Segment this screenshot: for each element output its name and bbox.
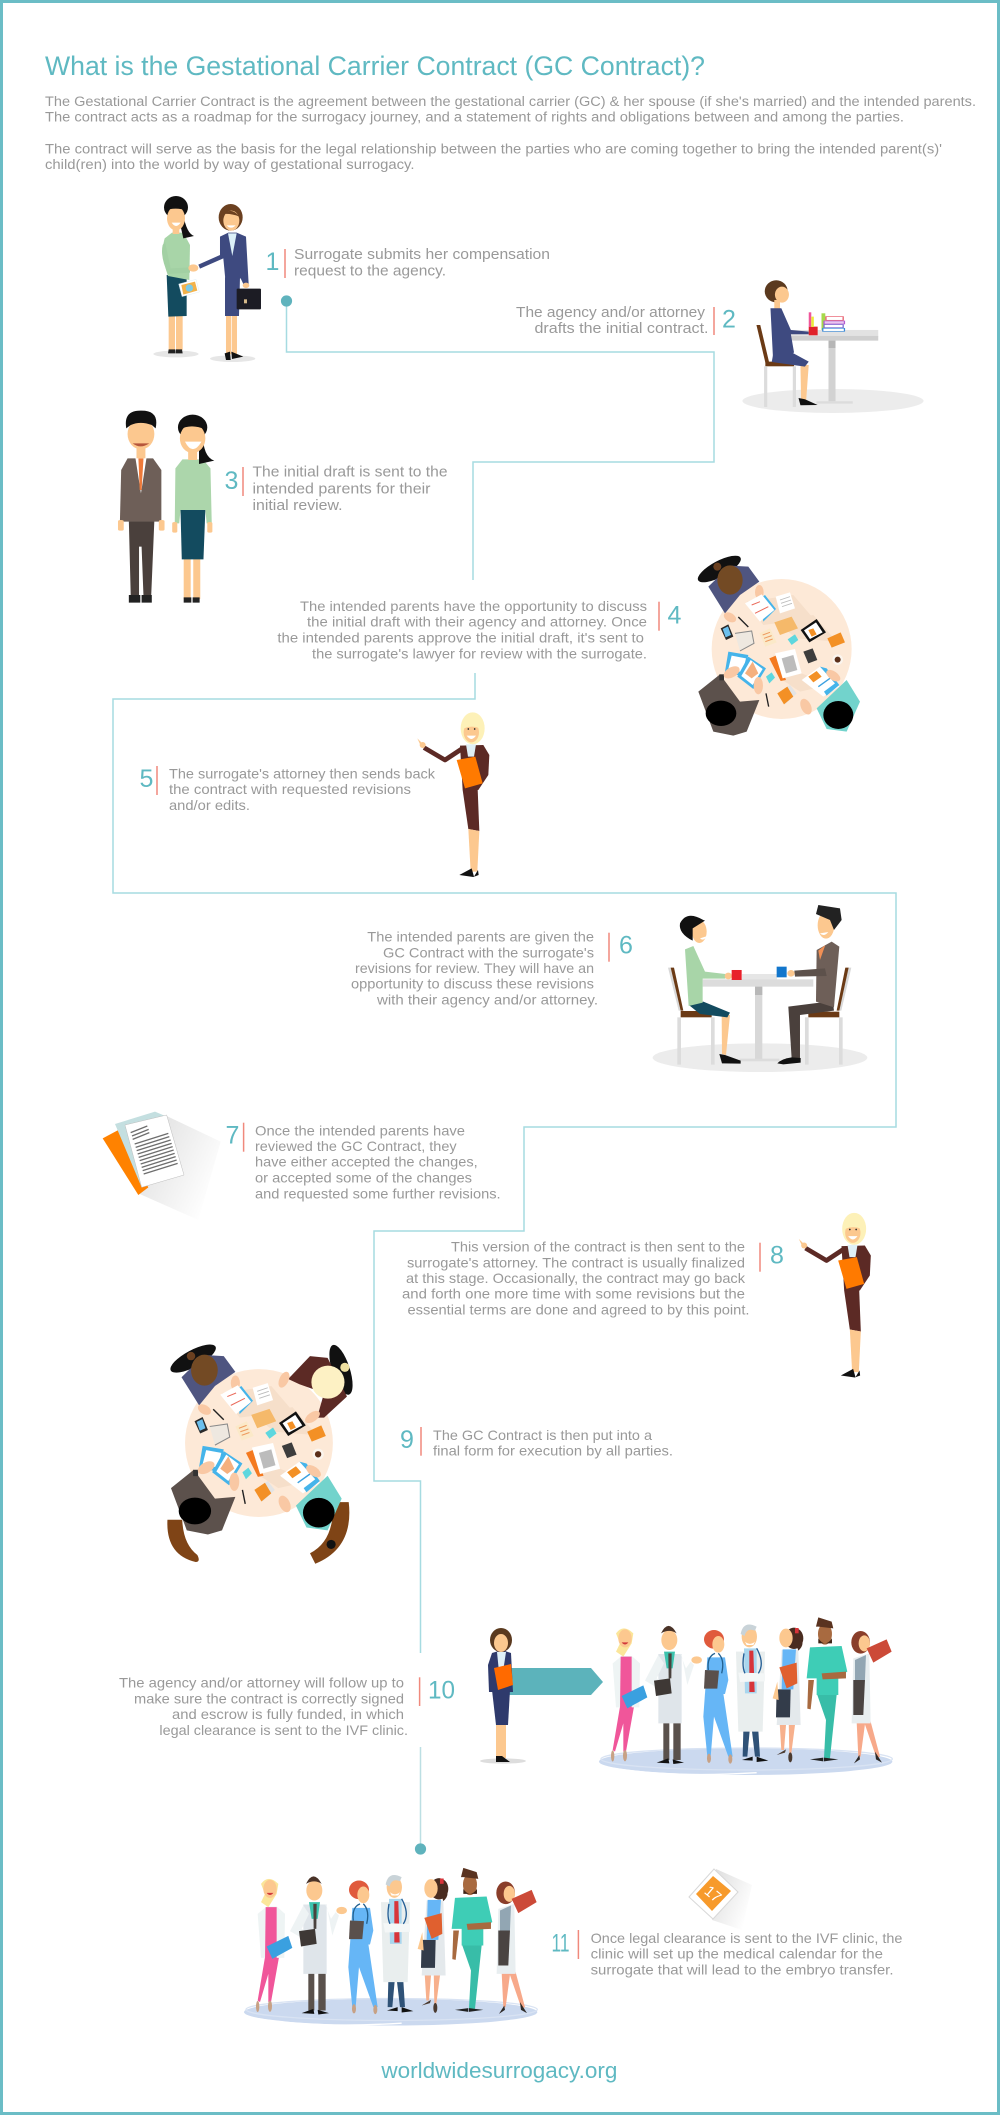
timeline connector bbox=[113, 301, 896, 1849]
intro text: The contract acts as a roadmap for the surrogacy journey, and a statement of rights and obligations between and among the parties. bbox=[45, 110, 904, 125]
intro text bbox=[45, 94, 976, 172]
timeline end dot bbox=[415, 1843, 426, 1855]
step 11 text: Once legal clearance is sent to the IVF clinic, the bbox=[591, 1930, 903, 1946]
illustration: contract document stack bbox=[103, 1112, 221, 1220]
step 5 text: the contract with requested revisions bbox=[169, 781, 411, 797]
number 11: 11 bbox=[552, 1930, 570, 1958]
step 8 text: This version of the contract is then sent to the bbox=[451, 1239, 745, 1255]
step 6 text bbox=[351, 929, 598, 1007]
step 7 text: reviewed the GC Contract, they bbox=[255, 1138, 457, 1154]
step 5 text: and/or edits. bbox=[169, 797, 250, 813]
step 11 bbox=[552, 1930, 903, 1977]
step 2 text bbox=[516, 304, 708, 337]
step 11 text: surrogate that will lead to the embryo transfer. bbox=[591, 1961, 894, 1977]
step 3 text: initial review. bbox=[252, 497, 342, 514]
step 8 text: essential terms are done and agreed to by this point. bbox=[408, 1302, 750, 1318]
intro text: The Gestational Carrier Contract is the agreement between the gestational carrier (GC) & her spouse (if she's married) and the intended parents. bbox=[45, 94, 976, 109]
step 1 text: Surrogate submits her compensation bbox=[294, 246, 550, 263]
step 10 text: make sure the contract is correctly signed bbox=[134, 1690, 404, 1706]
step 9 text: final form for execution by all parties. bbox=[433, 1442, 673, 1458]
step 11 text bbox=[591, 1930, 903, 1977]
illustration: surrogate and agent shaking hands bbox=[153, 196, 261, 362]
number 7: 7 bbox=[226, 1122, 239, 1150]
step 5 text: The surrogate's attorney then sends back bbox=[169, 765, 436, 781]
step 2 bbox=[516, 304, 736, 337]
step 7 text bbox=[255, 1122, 501, 1201]
number 4: 4 bbox=[668, 602, 682, 630]
step 9 text: The GC Contract is then put into a bbox=[433, 1427, 652, 1443]
illustration: couple at table with cups bbox=[653, 905, 867, 1072]
arrow bbox=[505, 1668, 603, 1695]
step 6 text: GC Contract with the surrogate's bbox=[383, 944, 594, 960]
step 6 text: opportunity to discuss these revisions bbox=[351, 976, 594, 992]
step 8 text: at this stage. Occasionally, the contract may go back bbox=[406, 1270, 746, 1286]
intro text: child(ren) into the world by way of gestational surrogacy. bbox=[45, 157, 414, 172]
step 7 text: have either accepted the changes, bbox=[255, 1154, 478, 1170]
illustration: woman at desk bbox=[742, 280, 924, 413]
step 2 text: The agency and/or attorney bbox=[516, 304, 706, 321]
step 2 text: drafts the initial contract. bbox=[534, 320, 708, 337]
number 3: 3 bbox=[224, 467, 238, 495]
step 7 text: Once the intended parents have bbox=[255, 1122, 465, 1138]
step 6 text: with their agency and/or attorney. bbox=[376, 991, 598, 1007]
step 6 bbox=[351, 929, 633, 1007]
step 6 text: The intended parents are given the bbox=[367, 929, 594, 945]
step 4 text bbox=[277, 598, 647, 661]
step 5 text bbox=[169, 765, 436, 813]
step 10 text bbox=[119, 1675, 408, 1738]
step 8 text: surrogate's attorney. The contract is usually finalized bbox=[407, 1254, 745, 1270]
illustration: attorney pointing bbox=[417, 712, 489, 877]
step 11 text: clinic will set up the medical calendar for the bbox=[591, 1946, 883, 1962]
number 10: 10 bbox=[428, 1676, 455, 1704]
illustration: agent with folder bbox=[480, 1628, 526, 1764]
icon: calendar 17 bbox=[689, 1869, 752, 1930]
illustration: attorney pointing bbox=[799, 1213, 871, 1377]
step 7 text: or accepted some of the changes bbox=[255, 1170, 472, 1186]
step 10 text: legal clearance is sent to the IVF clinic. bbox=[159, 1722, 408, 1738]
number 9: 9 bbox=[400, 1426, 414, 1454]
step 7 bbox=[103, 1112, 501, 1220]
step 4 text: The intended parents have the opportunity to discuss bbox=[300, 598, 647, 614]
step 8 bbox=[402, 1239, 784, 1318]
step 10 text: The agency and/or attorney will follow up to bbox=[119, 1675, 404, 1691]
step 4 bbox=[277, 598, 682, 661]
number 5: 5 bbox=[140, 765, 153, 793]
icon: calendar 17: 17 bbox=[701, 1883, 725, 1906]
step 9 text bbox=[433, 1427, 673, 1458]
illustration: round table meeting, three people bbox=[694, 551, 860, 736]
intro text: The contract will serve as the basis for the legal relationship between the parties who are coming together to bring the intended parent(s)' bbox=[45, 141, 942, 156]
number 2: 2 bbox=[722, 306, 736, 334]
number 1: 1 bbox=[266, 248, 279, 276]
step 3 bbox=[224, 464, 448, 514]
step 4 text: the intended parents approve the initial draft, it's sent to bbox=[277, 630, 644, 646]
illustration: intended parents couple bbox=[118, 411, 214, 603]
footer website: worldwidesurrogacy.org bbox=[380, 2058, 617, 2083]
step 3 text bbox=[252, 464, 448, 514]
step 8 text: and forth one more time with some revisions but the bbox=[402, 1286, 745, 1302]
step 10 bbox=[119, 1675, 455, 1738]
step 7 text: and requested some further revisions. bbox=[255, 1185, 501, 1201]
step 5 bbox=[140, 765, 436, 813]
step 4 text: the initial draft with their agency and attorney. Once bbox=[307, 614, 647, 630]
step 8 text bbox=[402, 1239, 750, 1318]
timeline start dot bbox=[281, 295, 292, 307]
step 4 text: the surrogate's lawyer for review with the surrogate. bbox=[312, 645, 647, 661]
number 8: 8 bbox=[770, 1242, 784, 1270]
step 3 text: intended parents for their bbox=[252, 480, 430, 497]
illustration: round table meeting, four people bbox=[167, 1339, 357, 1564]
illustration: medical team bbox=[599, 1617, 892, 1775]
step 3 text: The initial draft is sent to the bbox=[252, 464, 448, 481]
illustration: medical team at clinic bbox=[244, 1868, 537, 2025]
step 10 text: and escrow is fully funded, in which bbox=[172, 1706, 404, 1722]
number 6: 6 bbox=[619, 932, 633, 960]
step 1 text bbox=[294, 246, 550, 280]
step 1 bbox=[266, 246, 550, 280]
step 1 text: request to the agency. bbox=[294, 263, 446, 280]
step 6 text: revisions for review. They will have an bbox=[355, 960, 594, 976]
title: What is the Gestational Carrier Contract (GC Contract)? bbox=[45, 51, 705, 81]
step 9 bbox=[400, 1426, 673, 1458]
